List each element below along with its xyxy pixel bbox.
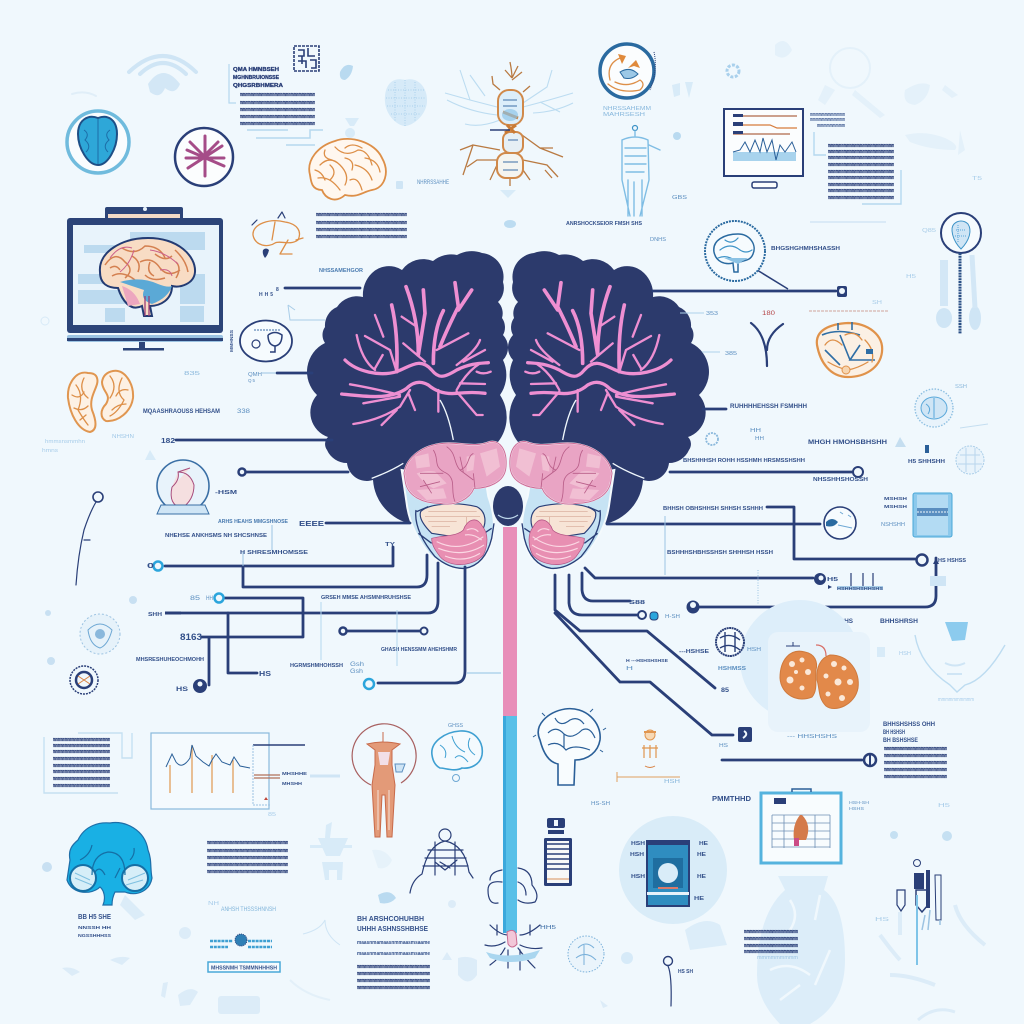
text block: right of monitor: mmmmmmmmmmmmmmmmmmmmmmmmm [828, 195, 894, 201]
labels: right upper: MHGH HMOHSBHSHH [808, 440, 887, 446]
text block: top left: QHGSRBHMERA [233, 83, 283, 89]
text block: centre lower: mmmmmmmmmmmmmmmmmmmmmmmmmmmmmmmm [207, 855, 288, 861]
labels: left connector text: 8163 [180, 632, 202, 642]
text block: stem-left: mmmmmmmmmmmmmmmmmmmmmmmmmmmmm [357, 971, 430, 977]
text block: under orange brain [316, 212, 407, 240]
decoration: pale face [877, 622, 1005, 703]
icon: neuron tree [445, 62, 573, 228]
panel: orange lungs: --- HHSHSHS [787, 734, 838, 740]
icon: stethoscope head with spoons [906, 213, 981, 334]
icon: pale small cluster [672, 65, 739, 140]
text block: right lower: mmmmmmmmmmmmmmmmmmmmmmmm [884, 774, 947, 780]
icon: orange circle portrait: MAHRSESH [603, 112, 646, 118]
decoration: pale blobs top [340, 65, 359, 138]
text block: right lower: mmmmmmmmmmmmmmmmmmmmmmmm [884, 760, 947, 766]
icon: clipboard report: HSHS [849, 806, 864, 811]
labels: left connector text: MHSRESHUHEOCHMOHH [136, 657, 204, 663]
labels: left connector text: H SHRESMHOMSSE [240, 550, 308, 556]
icon: pale patterned heart [385, 79, 427, 126]
icon: orange brain [309, 139, 386, 199]
labels: right upper: RUHHHHEHSSH FSMHHH [730, 404, 807, 410]
labels: right upper: BHSHHHSH ROHH HSSHMH HRSMSSHSHH [683, 458, 805, 464]
labels: left connector text: 85 [190, 596, 201, 602]
icon: stethoscope head with spoons: Q85 [922, 228, 936, 234]
label: connector cluster: QMH [248, 372, 262, 378]
decoration: pale top-right figures [775, 41, 965, 155]
line chart panel [151, 733, 340, 818]
pale caption strip [810, 221, 886, 223]
icon: mini cell with caption box: NH [208, 901, 220, 907]
labels: right upper: BSHHHSHBHSSHSH SHHHSH HSSH [667, 550, 773, 556]
icon: ECG monitor [724, 109, 803, 188]
text block: centre lower: mmmmmmmmmmmmmmmmmmmmmmmmmmmmmmmm [207, 848, 288, 854]
labels: left connector text: 0 [147, 563, 154, 570]
label: heading above report: PMMTHHD [712, 796, 751, 803]
icon: mini cell with caption box [208, 901, 280, 972]
icon: orange brain right [817, 322, 882, 377]
icon: brain in dotted ring [705, 221, 765, 281]
text block: under orange brain: mmmmmmmmmmmmmmmmmmmmmmmmmmmmmmmmmm [316, 227, 407, 233]
icon: stick probe small [664, 956, 693, 1006]
line chart panel: 85 [268, 812, 276, 818]
icon: dark cell with labels [626, 628, 762, 749]
small pale bottom-right circles [600, 803, 955, 1020]
label: stem connector [680, 300, 889, 357]
icon: blue box: HS HSHSS [938, 558, 967, 564]
pink lobe [404, 441, 506, 504]
text block: right lower: BH BSHSHSE [883, 738, 918, 744]
decoration: pale round neurons right: SSH [955, 384, 967, 390]
label: left upper connector: HH5 [259, 292, 273, 298]
text block: stem-left [357, 916, 430, 991]
decoration: pale face: HSH [899, 651, 911, 657]
decoration: pale round neurons right: H5 SHHSHH [908, 459, 945, 465]
chart: small bars [827, 573, 883, 591]
icon: clipboard report [761, 789, 869, 863]
icon: blue tree brain [533, 709, 606, 785]
small pale left decorations [42, 596, 137, 872]
icon: stick probe small: HS SH [678, 969, 693, 975]
text block: right of monitor: mmmmmmmmmmmmmmmmmmmmmmmmm [828, 149, 894, 155]
icon: oval stethoscope: MMHNSS [229, 330, 234, 352]
label: stem connector: 180 [762, 311, 776, 317]
central brain [307, 251, 709, 570]
label: connector cluster [184, 371, 276, 383]
icon: device in pale circle: HE [697, 874, 707, 880]
line chart panel: MHSHHE [282, 771, 307, 776]
icon: blue box [881, 493, 967, 586]
icon: orange figure with axis: HSH [664, 779, 681, 785]
label: kidneys heading: NHSHN [112, 434, 134, 440]
icon: device in pale circle: HE [699, 841, 709, 847]
central stem [503, 527, 517, 933]
label: ring brain heading: BHGSHGHMHSHASSH [771, 246, 840, 252]
label: blue brain caption: NNSSH HH [78, 925, 111, 930]
labels: right upper [629, 404, 887, 620]
text block: right lower: BHHSHSHSS OHH [883, 722, 935, 728]
labels: left connector text: ARHS HEAHS MMGSHNOSE [218, 519, 288, 525]
text block: on vase: mmmmmmmmmmmmmmmmmmm [744, 929, 798, 935]
labels: right upper: BHHSH OBHSHHSH SHHSH SSHHH [663, 506, 763, 512]
small labels near figure: DNHS [650, 237, 667, 243]
small label: pale icon: HS-SH [591, 801, 610, 807]
chart: small bars: H5 [827, 577, 838, 583]
labels: right upper: HH [750, 428, 762, 434]
icon: roots upper [488, 868, 537, 903]
label: connector cluster: Q5 [248, 378, 255, 383]
icon: dark cell with labels: HSHMSS [718, 666, 746, 672]
icon: teal brain in ring [67, 111, 129, 173]
icon: dark cell with labels: 85 [721, 688, 730, 694]
label: kidneys heading: MQAASHRAOUSS HEHSAM [143, 409, 220, 415]
icon: mini cell with caption box: MHSSNMH TSMMNHHHSH [211, 966, 277, 972]
text block: under orange brain: mmmmmmmmmmmmmmmmmmmmmmmmmmmmmmmmmm [316, 220, 407, 226]
icon: pale wifi arcs [72, 56, 196, 96]
text block: stem-left: mmmmmmmmmmmmmmmmmmmmmmmmmmmmm [357, 985, 430, 991]
icon: dome outline [410, 829, 473, 893]
text block: on vase [744, 929, 798, 961]
label: blue brain caption: BB H5 SHE [78, 914, 111, 921]
brainstem knob [493, 486, 523, 526]
text block: right of monitor: mmmmmmmmmmmmmmmmmmmmmmmmm [828, 155, 894, 161]
text block: lower left: mmmmmmmmmmmmmmmmmmmmmmmm [53, 763, 110, 769]
icon: device in pale circle: HSH [631, 841, 646, 847]
label: left upper connector [259, 287, 325, 320]
text block: lower left: mmmmmmmmmmmmmmmmmmmmmmmm [53, 776, 110, 782]
icon: stethoscope head with spoons: H5 [906, 274, 916, 280]
icon: device in pale circle: HSH [631, 874, 646, 880]
text block: centre lower: mmmmmmmmmmmmmmmmmmmmmmmmmmmmmmmm [207, 862, 288, 868]
icon: blue box: MSHSH [884, 496, 907, 501]
icon: orange circle portrait: NHRSSAHEMM [603, 106, 651, 112]
icon: device in pale circle: HSH [630, 852, 645, 858]
labels: left connector text: GHASH HENSSMM AHEHSHMR [381, 647, 457, 653]
monitor: brain scan [67, 207, 223, 350]
text block: top left: mmmmmmmmmmmmmmmmmmmmmmmmmmmm [240, 92, 315, 98]
icon: orange kidneys [68, 371, 133, 432]
icon: small orange organ: NHSSAMEHGOR [319, 268, 363, 274]
icon: orange circle portrait [600, 44, 655, 118]
icon: medicine bottle [544, 818, 572, 886]
labels: left connector text: EEEE [299, 521, 324, 528]
text block: right of monitor: mmmmmmmmmmmmmmmmmmmmmmmmm [828, 162, 894, 168]
label: connector cluster: 835 [184, 371, 200, 377]
decoration: pale round neurons right [895, 384, 988, 474]
text block: top left: mmmmmmmmmmmmmmmmmmmmmmmmmmmm [240, 107, 315, 113]
text block: right lower: mmmmmmmmmmmmmmmmmmmmmmmm [884, 753, 947, 759]
icon: dark cell with labels: HS [719, 743, 729, 749]
text block: stem-left: BH ARSHCOHUHBH [357, 916, 424, 923]
icon: mini cell with caption box: ANHSH THSSSHNNSH [221, 907, 276, 913]
text block: stem-left: maasnmamaasnmmaasmsaame [357, 951, 430, 957]
text block: centre lower: mmmmmmmmmmmmmmmmmmmmmmmmmmmmmmmm [207, 869, 288, 875]
text block: lower left [44, 733, 132, 793]
text block: centre lower: mmmmmmmmmmmmmmmmmmmmmmmmmmmmmmmm [207, 840, 288, 846]
icon: Y nerve [751, 323, 783, 366]
connector lines: right [555, 270, 936, 760]
text block: top left: mmmmmmmmmmmmmmmmmmmmmmmmmmmm [240, 121, 315, 127]
small label: lock and caption [396, 180, 449, 189]
pale body figure [310, 822, 392, 880]
icon: IV equipment: HS [875, 917, 890, 923]
icon: glass dome organ: -HSM [215, 490, 237, 496]
text block: on vase: mmmmmmmmmmmmmmmmmmm [744, 936, 798, 942]
labels: left connector text: TY [385, 542, 395, 548]
text block: lower left: mmmmmmmmmmmmmmmmmmmmmmmm [53, 783, 110, 789]
text block: top left [229, 64, 323, 145]
text block: right of monitor: mmmmmmmmmmmmmmmmmmmmmmmmm [828, 143, 894, 149]
icon: small orange organ [252, 212, 363, 274]
icon: IV equipment [875, 860, 985, 985]
labels: right upper: S88 [629, 600, 645, 606]
text block: on vase: mmmmmmmmmmmmmmmmmmm [744, 949, 798, 955]
label: stem connector: 353 [706, 311, 718, 317]
capsule [402, 470, 494, 570]
icon: dark cell with labels: HSH [747, 647, 762, 653]
label: kidneys heading: hmns [42, 448, 59, 454]
decoration: pale face: mmmmmmmmmm [938, 697, 974, 703]
pale decorations: bottom left [62, 892, 477, 1014]
icon: dark cell with labels: H ---HSHSHSHSE [626, 658, 668, 663]
labels: left connector text: Gsh [350, 662, 364, 668]
text block: stem-left: maasnmamaasnmmaasmsaame [357, 940, 430, 946]
scan brain [100, 238, 195, 316]
text block: stem-left: mmmmmmmmmmmmmmmmmmmmmmmmmmmmm [357, 978, 430, 984]
text block: lower left: mmmmmmmmmmmmmmmmmmmmmmmm [53, 737, 110, 743]
label: kidneys heading: 182 [161, 438, 175, 445]
label: blue brain caption: NGSSHHHSS [78, 933, 111, 938]
text block: right of monitor: mmmmmmmmmmmmmmmmmmmmmmmmm [828, 188, 894, 194]
icon: device in pale circle: HE [697, 852, 707, 858]
labels: left connector text: SHH [148, 612, 162, 618]
text block: lower left: mmmmmmmmmmmmmmmmmmmmmmmm [53, 749, 110, 755]
text block: right lower [883, 722, 947, 780]
icon: blue box: NSHSHH [881, 522, 905, 528]
text block: stem-left: mmmmmmmmmmmmmmmmmmmmmmmmmmmmm [357, 964, 430, 970]
text block: centre lower [207, 840, 288, 875]
text block: right of monitor: mmmmmmmmmmmm [810, 112, 845, 118]
label: blue brain caption [78, 914, 111, 938]
labels: right upper: HH [755, 436, 764, 442]
labels: left connector text [136, 519, 457, 693]
label: stem connector: 385 [725, 351, 737, 357]
connector lines: left [165, 288, 501, 685]
label: stem connector: SH [872, 300, 883, 306]
text block: lower left: mmmmmmmmmmmmmmmmmmmmmmmm [53, 743, 110, 749]
icon: dark cell with labels: ---HSHSE [679, 649, 710, 655]
icon: oval stethoscope [229, 320, 292, 362]
pale vase background [685, 876, 845, 1024]
text block: on vase: mmmmmmmmmmmmmmmmmmm [744, 943, 798, 949]
labels: left connector text: NHEHSE ANKHSMS NH SHCSHNSE [165, 533, 267, 539]
text block: right of monitor [810, 112, 901, 204]
label: lungs panel headings: BHHSHRSH [880, 619, 918, 625]
icon: dark cell with labels: H [626, 666, 634, 672]
left hemisphere [307, 251, 508, 570]
icon: glass dome organ [157, 460, 237, 514]
icon: roots lower [485, 925, 556, 970]
icon: face circle [824, 507, 856, 539]
labels: left connector text: HGRMSHMHOHSSH [290, 663, 343, 669]
text block: top left: MGHNBRUIONSSE [233, 75, 280, 81]
chart: small bars: HSHHSHSHHSHS [837, 586, 883, 591]
labels: left connector text: Gsh [350, 669, 363, 675]
label: left upper connector: 8 [276, 287, 279, 293]
text block: top left: mmmmmmmmmmmmmmmmmmmmmmmmmmmm [240, 100, 315, 106]
small labels near figure: GBS [672, 195, 688, 201]
line chart panel: MHSHH [282, 781, 302, 786]
icon: device in pale circle [619, 816, 727, 924]
text block: right of monitor: mmmmmmmmmmmmmmmmmmmmmmmmm [828, 175, 894, 181]
labels: left connector text: GRSEH MMSE AHSMNHRUHSHSE [321, 595, 411, 601]
caption: figure label: ANRSHOCKSEIOR FMSH SHS [566, 221, 642, 227]
text block: right of monitor: mmmmmmmmmmmmmmmmmmmmmmmmm [828, 169, 894, 175]
screen panels [78, 232, 205, 322]
small pale bottom-right circles: H5 [938, 803, 950, 809]
icon: blue outline brain: GHSS [448, 723, 464, 729]
text block: right lower: BH HSHSH [883, 730, 905, 736]
text block: right lower: mmmmmmmmmmmmmmmmmmmmmmmm [884, 746, 947, 752]
labels: left connector text: HS [259, 671, 271, 678]
small label: lock and caption: NHRRSSAHHE [417, 180, 449, 186]
icon: orange figure with axis [617, 730, 681, 785]
icon: blue body figure [622, 126, 660, 216]
icon: roots lower: HH5 [540, 925, 556, 931]
right hemisphere [508, 251, 709, 570]
connector end markers [154, 286, 939, 766]
icon: device in pale circle: HE [694, 896, 705, 902]
text block: on vase: mmmmmmmmm [757, 955, 798, 961]
labels: left connector text: HS [176, 687, 188, 693]
text block: top left: QMA HMNBSEH [233, 67, 279, 73]
icon: round pale dotted [568, 936, 633, 972]
icon: stick probe [76, 492, 103, 585]
text block: top left: mmmmmmmmmmmmmmmmmmmmmmmmmmmm [240, 114, 315, 120]
icon: body in circle [352, 724, 416, 837]
icon: dark round neuron [70, 666, 98, 694]
panel: orange lungs [740, 600, 870, 740]
label: lungs panel headings [759, 619, 918, 625]
label: kidneys heading: hmmsnsmmhn [45, 439, 85, 445]
label: kidneys heading: 338 [237, 409, 251, 415]
text block: under orange brain: mmmmmmmmmmmmmmmmmmmmmmmmmmmmmmmmmm [316, 234, 407, 240]
text block: stem-left: UHHH ASHNSSHBHSE [357, 926, 428, 933]
icon: blue box: MSHSH [884, 504, 907, 509]
text block: right of monitor: mmmmmmmmm [817, 123, 845, 129]
icon: blue outline brain [432, 723, 482, 782]
text block: lower left: mmmmmmmmmmmmmmmmmmmmmmmm [53, 769, 110, 775]
text block: right of monitor: mmmmmmmmmmmmmmmmmmmmmmmmm [828, 182, 894, 188]
label: lungs panel headings: NHSHSH MMHHSSRH CHSSHS [759, 619, 853, 625]
icon: purple star neuron [175, 128, 233, 186]
small labels near figure [650, 195, 688, 243]
labels: right upper: H-SH [665, 614, 680, 620]
text block: lower left: mmmmmmmmmmmmmmmmmmmmmmmm [53, 756, 110, 762]
labels: left connector text: HH [206, 596, 213, 602]
label: kidneys heading [41, 317, 251, 460]
labels: right upper: NHSSHHSHOSSH [813, 477, 868, 483]
text block: right of monitor: mmmmmmmmmmmm [810, 117, 845, 123]
text block: under orange brain: mmmmmmmmmmmmmmmmmmmmmmmmmmmmmmmmmm [316, 212, 407, 218]
text block: right lower: mmmmmmmmmmmmmmmmmmmmmmmm [884, 767, 947, 773]
icon: clipboard report: HSH-SH [849, 800, 869, 805]
small pale icon right: T5 [972, 176, 982, 182]
icon: pale round neuron [80, 614, 120, 654]
icon: blue solid brain [67, 822, 152, 920]
icon: maze square [294, 46, 319, 71]
